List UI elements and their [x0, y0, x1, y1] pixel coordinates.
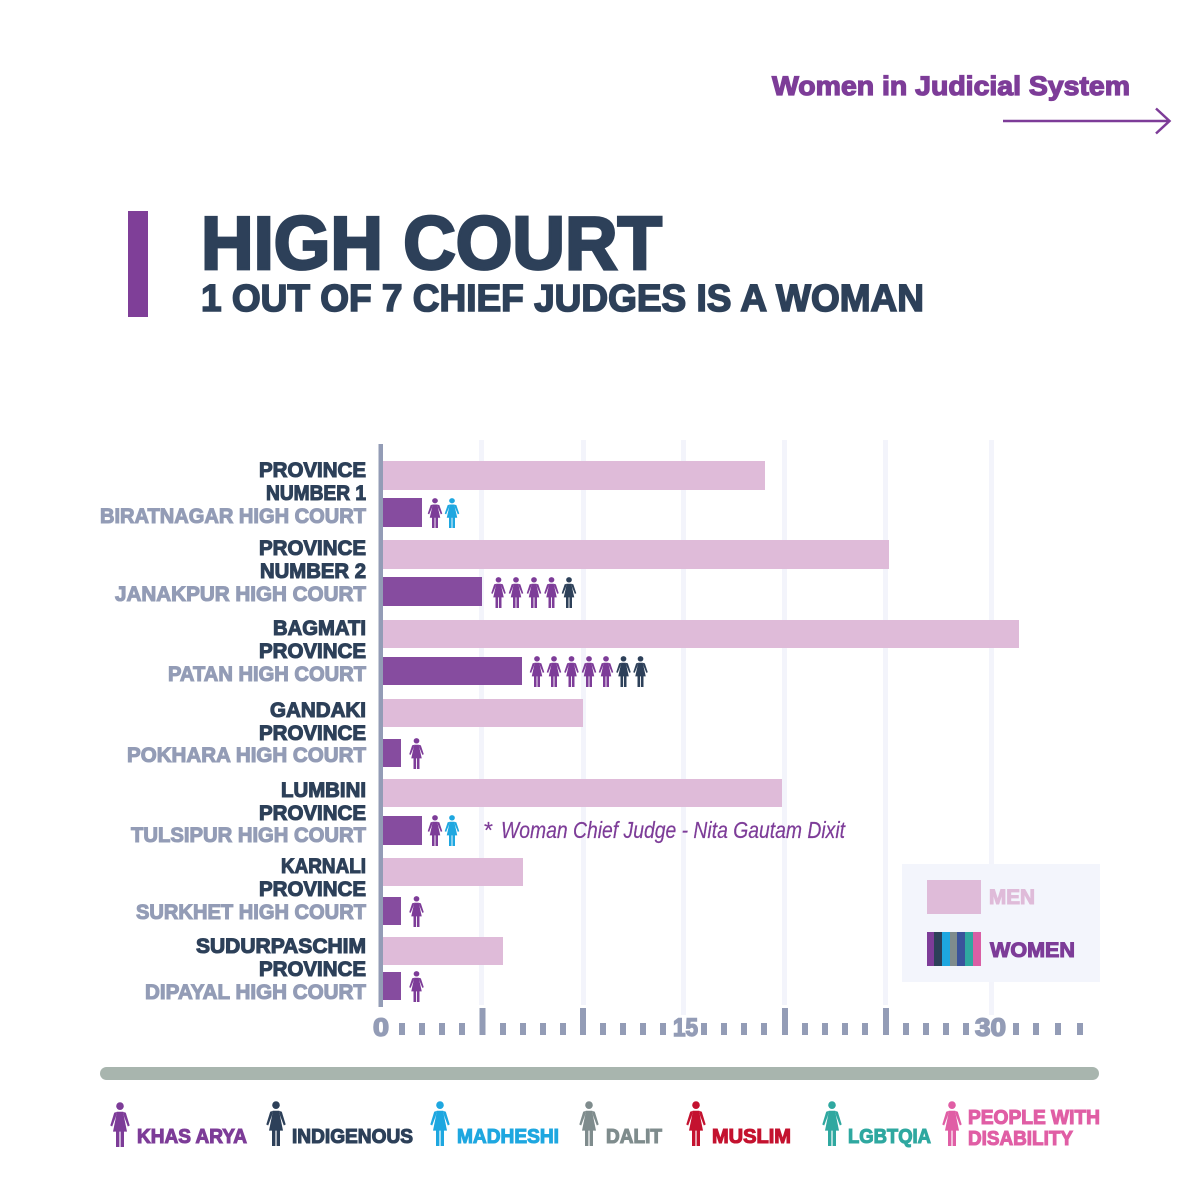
- note: woman chief judge: *: [483, 817, 493, 843]
- row: Gandaki Province: PROVINCE: [259, 722, 366, 745]
- legend: Indigenous: [266, 1101, 413, 1148]
- row: Lumbini Province: TULSIPUR HIGH COURT: [131, 824, 366, 847]
- row: Karnali Province: SURKHET HIGH COURT: [136, 901, 366, 924]
- row: Karnali Province: PROVINCE: [259, 878, 366, 901]
- row: Province Number 2: NUMBER 2: [260, 560, 366, 583]
- legend: People with disability: [942, 1101, 1100, 1150]
- chart legend: [902, 864, 1100, 982]
- row: Lumbini Province: LUMBINI: [281, 779, 366, 802]
- row: Gandaki Province: [127, 699, 583, 769]
- axis numbers: 15: [673, 1014, 698, 1042]
- row: Province Number 1: BIRATNAGAR HIGH COURT: [100, 505, 366, 528]
- legend: LGBTQIA: [822, 1101, 931, 1148]
- legend: LGBTQIA: LGBTQIA: [848, 1126, 931, 1148]
- row: Lumbini Province: PROVINCE: [259, 802, 366, 825]
- grid lines: [479, 440, 994, 1015]
- section link: Women in Judicial System: Women in Judicial System: [772, 71, 1130, 101]
- legend: Indigenous: INDIGENOUS: [292, 1126, 413, 1148]
- axis ticks: [378, 444, 1083, 1035]
- legend: Muslim: MUSLIM: [712, 1126, 791, 1148]
- row: Bagmati Province: [168, 617, 1019, 687]
- men swatch: [927, 880, 981, 914]
- legend: Muslim: [686, 1101, 791, 1148]
- accent bar: [128, 211, 148, 317]
- legend: Dalit: [579, 1101, 662, 1148]
- legend: People with disability: DISABILITY: [968, 1128, 1074, 1150]
- row: Province Number 2: JANAKPUR HIGH COURT: [115, 583, 366, 606]
- legend: People with disability: PEOPLE WITH: [968, 1107, 1100, 1129]
- row: Sudurpaschim Province: PROVINCE: [259, 958, 366, 981]
- row: Sudurpaschim Province: [145, 935, 503, 1004]
- row: Gandaki Province: GANDAKI: [270, 699, 366, 722]
- group legend: [110, 1101, 1100, 1150]
- row: Province Number 1: [100, 459, 765, 528]
- row: Bagmati Province: BAGMATI: [273, 617, 366, 640]
- divider bar: [100, 1067, 1099, 1080]
- note: woman chief judge: Woman Chief Judge - Nita Gautam Dixit: [501, 817, 846, 843]
- row: Karnali Province: [136, 855, 523, 927]
- arrow: [1003, 108, 1170, 134]
- axis numbers: 0: [373, 1014, 389, 1042]
- section link: Women in Judicial System: [772, 71, 1170, 134]
- axis numbers: [373, 1014, 1006, 1042]
- chart legend: WOMEN: [990, 939, 1075, 962]
- row: Bagmati Province: PROVINCE: [259, 640, 366, 663]
- heading: HIGH COURT: [201, 201, 662, 285]
- row: Bagmati Province: PATAN HIGH COURT: [168, 663, 366, 686]
- row: Sudurpaschim Province: SUDURPASCHIM: [196, 935, 366, 958]
- bar chart: [100, 440, 1083, 1042]
- row: Province Number 1: PROVINCE: [259, 459, 366, 482]
- women swatch: [927, 932, 981, 966]
- legend: Dalit: DALIT: [606, 1126, 662, 1148]
- title block: [128, 201, 924, 320]
- legend: Khas Arya: KHAS ARYA: [137, 1126, 247, 1148]
- legend: Madheshi: MADHESHI: [457, 1126, 559, 1148]
- axis numbers: 30: [975, 1014, 1006, 1042]
- row: Gandaki Province: POKHARA HIGH COURT: [127, 744, 366, 767]
- row: Province Number 1: NUMBER 1: [266, 482, 366, 505]
- row: Province Number 2: [115, 537, 889, 608]
- row: Sudurpaschim Province: DIPAYAL HIGH COURT: [145, 981, 366, 1004]
- legend: Madheshi: [430, 1101, 559, 1148]
- subheading: 1 OUT OF 7 CHIEF JUDGES IS A WOMAN: [201, 278, 924, 320]
- row: Karnali Province: KARNALI: [281, 855, 366, 878]
- chart legend: MEN: [989, 886, 1035, 909]
- legend: Khas Arya: [110, 1102, 247, 1148]
- row: Lumbini Province: [131, 779, 846, 847]
- row: Province Number 2: PROVINCE: [259, 537, 366, 560]
